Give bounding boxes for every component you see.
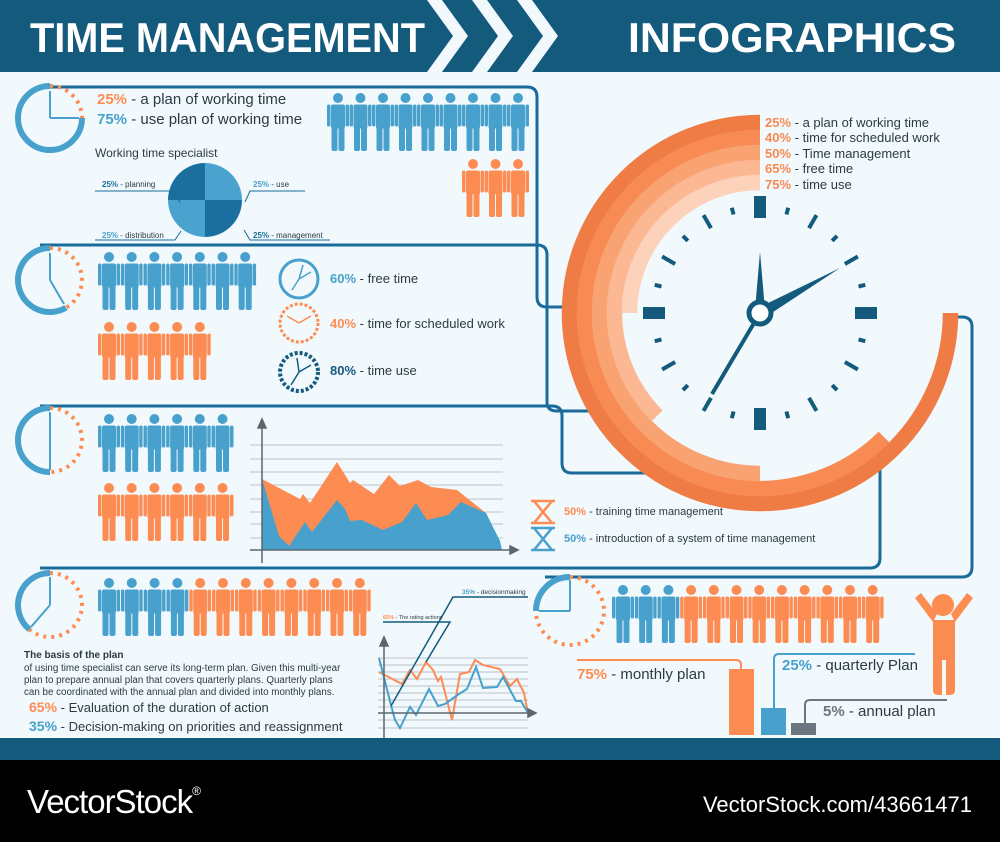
callout: rating actions — [383, 615, 450, 662]
clock hands — [712, 252, 840, 394]
icon: small clock 4 — [18, 573, 82, 637]
text block: basis of the plan — [24, 650, 343, 734]
panel 5: plans — [536, 577, 973, 735]
pie chart: working time specialist: 25% - distribution — [102, 231, 164, 240]
callout: rating actions: 65% - The rating actions — [383, 615, 443, 621]
text: clock legend — [330, 271, 505, 378]
text block: basis of the plan: can be coordinated with the annual plan and divided into monthly plans. — [24, 687, 334, 698]
bar chart: plans: 5% - annual plan — [823, 703, 936, 720]
text: percentages: 25% - a plan of working time — [97, 91, 286, 108]
orange rings — [570, 122, 950, 503]
callout: decisionmaking: 35% - decisionmaking — [462, 589, 526, 596]
header banner — [0, 0, 1000, 72]
people: 4.5 blue, 7.5 orange — [98, 578, 371, 636]
panel 1: plan of working time — [18, 86, 529, 240]
footer bar — [0, 738, 1000, 760]
text: clock legend: 80% - time use — [330, 363, 417, 378]
text: percentages: 75% - use plan of working time — [97, 111, 302, 128]
watermark footer — [0, 760, 1000, 842]
text: hourglass legend — [564, 506, 815, 545]
icon: small clock 3 — [18, 408, 82, 472]
text block: basis of the plan: 65% - Evaluation of the duration of action — [29, 699, 269, 715]
people: 9 blue, 3 orange — [327, 93, 529, 217]
icon: clock free time — [280, 260, 318, 298]
connector lines — [40, 87, 972, 577]
text: clock legend: 40% - time for scheduled work — [330, 316, 505, 331]
icon: clock time use — [280, 353, 318, 391]
ring legend: 50% - Time management — [765, 146, 911, 161]
text block: basis of the plan: plan to prepare annual plan that covers quarterly plans. Quarterly plans — [24, 675, 333, 686]
big clock — [570, 115, 950, 503]
bar chart: plans: 75% - monthly plan — [577, 666, 705, 683]
ring legend: 75% - time use — [765, 177, 852, 192]
icon: cheering person — [915, 593, 973, 695]
watermark footer: VectorStock.com/43661471 — [703, 792, 972, 817]
text: hourglass legend: 50% - introduction of a system of time management — [564, 533, 815, 545]
watermark footer: VectorStock — [27, 783, 192, 820]
panel 4: the basis of the plan — [18, 573, 536, 739]
ring legend — [765, 115, 940, 192]
text: hourglass legend: 50% - training time management — [564, 506, 723, 518]
icon: small clock 1 — [18, 86, 82, 150]
panel 3: area chart — [18, 408, 815, 563]
panel 2: free time — [18, 248, 505, 391]
watermark footer: ® — [192, 784, 201, 798]
people: 7 blue, 5 orange — [98, 252, 256, 380]
pie chart: working time specialist — [95, 146, 330, 240]
text block: basis of the plan: 35% - Decision-making on priorities and reassignment — [29, 718, 343, 734]
line chart — [378, 589, 536, 739]
icon: hourglass blue — [531, 528, 555, 550]
chevron arrows — [427, 0, 558, 72]
text block: basis of the plan: The basis of the plan — [24, 650, 123, 661]
icon: clock scheduled work — [280, 304, 318, 342]
people: 3 blue, 9 orange — [612, 585, 884, 643]
people: 6 blue, 6 orange — [98, 414, 234, 541]
callout: decisionmaking — [391, 589, 528, 706]
pie chart: working time specialist: 25% - use — [253, 180, 290, 189]
area chart — [250, 419, 518, 563]
bar chart: plans — [577, 654, 947, 735]
title: time management: TIME MANAGEMENT — [30, 14, 425, 61]
text: clock legend: 60% - free time — [330, 271, 418, 286]
title: infographics: INFOGRAPHICS — [628, 14, 956, 61]
ring legend: 40% - time for scheduled work — [765, 130, 940, 145]
icon: hourglass orange — [531, 501, 555, 523]
text: percentages — [97, 91, 302, 128]
pie chart: working time specialist: 25% - management — [253, 231, 324, 240]
clock ticks — [655, 208, 865, 418]
icon: small clock 2 — [18, 248, 82, 312]
icon: small clock 5 — [536, 577, 604, 645]
ring legend: 65% - free time — [765, 161, 853, 176]
pie chart: working time specialist: Working time specialist — [95, 146, 218, 160]
pie chart: working time specialist: 25% - planning — [102, 180, 155, 189]
bar chart: plans: 25% - quarterly Plan — [782, 657, 918, 674]
text block: basis of the plan: of using time specialist can serve its long-term plan. Given this multi-year — [24, 663, 341, 674]
ring legend: 25% - a plan of working time — [765, 115, 929, 130]
